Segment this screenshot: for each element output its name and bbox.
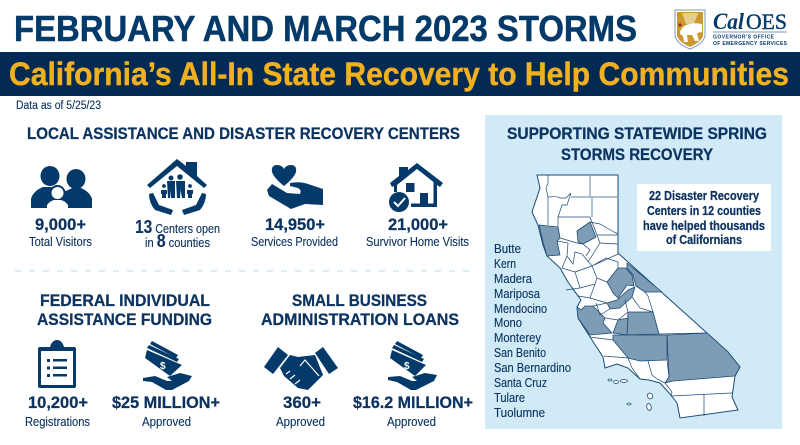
stat: SBA loans count: Approved [276,415,325,429]
county list: Tulare [494,391,525,405]
logo: Cal OES: Cal [713,9,745,34]
county list: San Benito [494,346,546,360]
county list [494,242,571,420]
stat: services [251,215,338,249]
stat: home visits: Survivor Home Visits [366,235,469,249]
callout: Centers in 12 counties [647,204,761,218]
stat: services: 14,950+ [265,215,325,234]
stat: centers: in 8 counties [145,231,210,251]
icon: home visits [389,163,443,212]
map: California counties [532,175,740,418]
callout: of Californians [666,233,742,247]
heading: small business: SMALL BUSINESS [292,292,427,310]
panel heading: STORMS RECOVERY [561,146,713,164]
heading: federal: FEDERAL INDIVIDUAL [40,292,210,310]
county list: Mariposa [494,287,540,301]
icon: heart in hand [267,165,323,209]
panel: statewide recovery [485,115,782,429]
stat: federal funding: $25 MILLION+ [112,393,220,412]
callout [637,184,771,251]
county list: Mendocino [494,302,547,316]
stat: SBA loans count [276,393,325,429]
stat: visitors: 9,000+ [35,215,86,234]
logo: Cal OES: OF EMERGENCY SERVICES [713,41,788,47]
heading: small business [261,292,459,329]
icon: visitors [31,166,92,208]
icon: money in hand: $ [404,361,410,372]
heading: small business: ADMINISTRATION LOANS [261,311,459,329]
logo: Cal OES: OES [746,9,787,34]
icon: centers house [147,159,207,215]
county list: Santa Cruz [494,376,547,390]
panel heading [507,125,767,164]
stat: federal funding [112,393,220,429]
stat: SBA loan amount: $16.2 MILLION+ [353,393,473,412]
icon: money in hand [388,341,437,390]
heading: federal: ASSISTANCE FUNDING [37,311,212,329]
title: FEBRUARY AND MARCH 2023 STORMS [14,8,637,49]
county list: Butte [494,242,521,256]
stat: registrations: Registrations [25,415,90,429]
icon: clipboard [38,340,76,388]
county list: Mono [494,316,522,330]
stat: SBA loan amount: Approved [387,415,436,429]
stat: visitors [29,215,92,249]
stat: registrations [25,393,90,429]
stat: SBA loan amount [353,393,473,429]
stat: home visits [366,215,469,249]
panel heading: SUPPORTING STATEWIDE SPRING [507,125,767,143]
stat: centers: 13 Centers open [135,217,220,237]
logo: Cal OES: GOVERNOR'S OFFICE [713,34,775,40]
stat: home visits: 21,000+ [388,215,448,234]
heading: federal [37,292,212,329]
icon: handshake [264,347,338,390]
stat: registrations: 10,200+ [28,393,88,412]
stat: SBA loans count: 360+ [283,393,321,412]
stat: services: Services Provided [251,235,338,249]
data date: Data as of 5/25/23 [16,100,101,112]
icon: money in hand [143,341,192,390]
icon: money in hand: $ [160,361,166,372]
stat: federal funding: Approved [142,415,191,429]
callout: 22 Disaster Recovery [649,189,759,203]
callout: have helped thousands [643,219,765,233]
logo: Cal OES [675,9,788,49]
heading: local assistance: LOCAL ASSISTANCE AND DISASTER RECOVERY CENTERS [27,125,460,143]
county list: Kern [494,257,516,271]
county list: Monterey [494,331,542,345]
stat: visitors: Total Visitors [29,235,92,249]
county list: San Bernardino [494,361,571,375]
stat: centers [135,217,220,251]
county list: Tuolumne [494,406,545,420]
county list: Madera [494,272,532,286]
